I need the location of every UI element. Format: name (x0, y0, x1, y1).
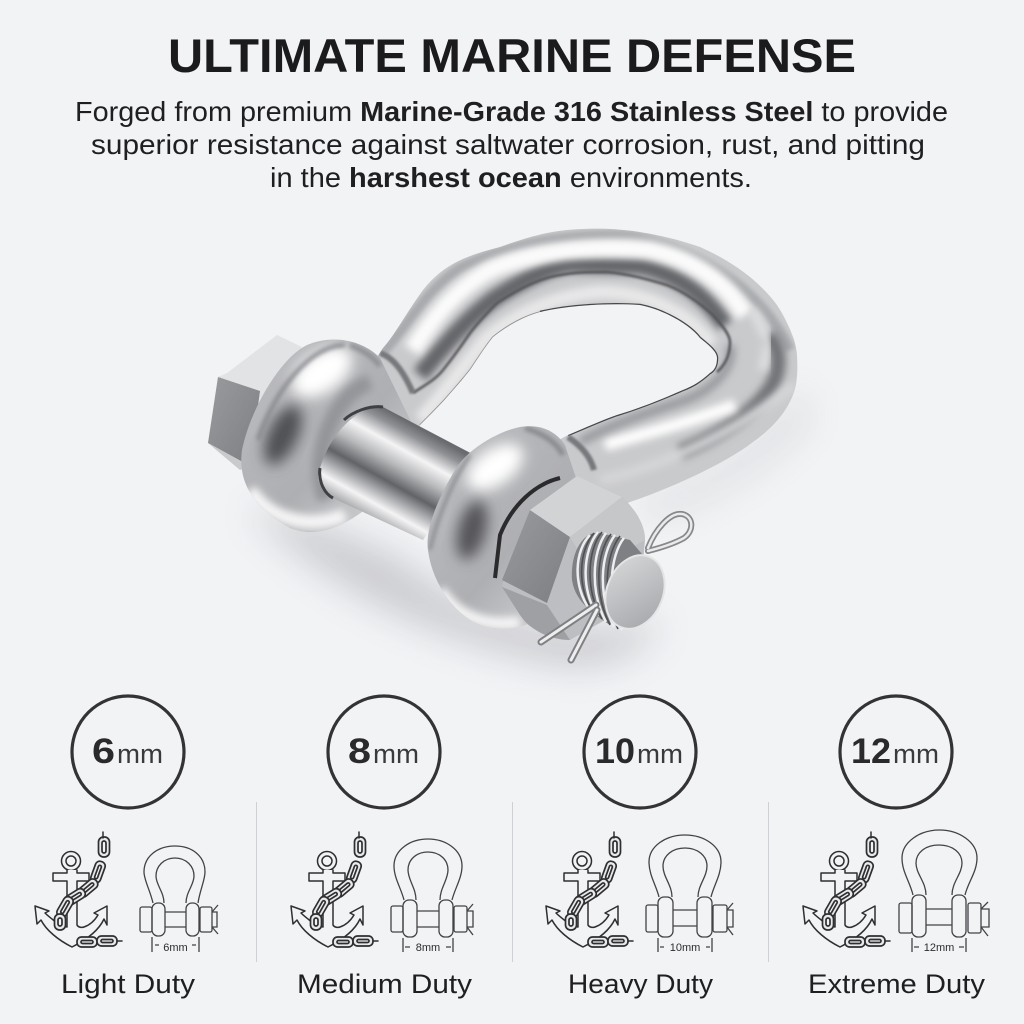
size badge 12mm (840, 696, 952, 808)
size badge 10mm: mm (637, 739, 683, 769)
dimension 6mm: 6mm (163, 942, 188, 954)
panel: 12mm extreme duty (803, 696, 989, 999)
label: medium duty: Medium Duty (297, 969, 473, 999)
label: light duty: Light Duty (61, 969, 196, 999)
icon: shackle diagram 6mm (140, 846, 218, 952)
size badge 8mm: mm (373, 739, 419, 769)
main product: stainless steel bow shackle (208, 210, 820, 666)
right lug (428, 426, 576, 628)
label: extreme duty: Extreme Duty (808, 969, 986, 999)
size badge 10mm: 10 (595, 732, 635, 771)
size badge 8mm (328, 696, 440, 808)
intro text block: superior resistance against saltwater corrosion, rust, and pitting (91, 129, 925, 160)
divider (256, 802, 768, 962)
panel: 6mm light duty (35, 696, 218, 999)
threaded pin end (572, 532, 675, 638)
dimension 12mm: 12mm (924, 942, 954, 954)
icon: shackle diagram 12mm (899, 830, 989, 952)
size badge 10mm (584, 696, 696, 808)
shackle shadow (250, 385, 810, 666)
icon: anchor and chain (291, 832, 378, 947)
near hex nut with washer gap (495, 476, 645, 640)
inner flange band (420, 292, 712, 420)
left lug (241, 340, 411, 532)
dimension 8mm: 8mm (416, 942, 440, 954)
intro text block: in the harshest ocean environments. (270, 162, 752, 193)
icon: anchor and chain (803, 832, 890, 947)
thread end cap (595, 546, 675, 638)
size badge 8mm: 8 (348, 732, 371, 771)
size badge 6mm (72, 696, 184, 808)
pin (318, 407, 480, 540)
hole edge (540, 304, 717, 435)
size badge 6mm: 6 (92, 732, 115, 771)
icon: shackle diagram 10mm (646, 835, 733, 952)
intro text block: Forged from premium Marine-Grade 316 Stainless Steel to provide (75, 96, 948, 127)
icon: anchor and chain (35, 832, 122, 947)
title: ULTIMATE MARINE DEFENSE (168, 29, 856, 82)
ridge line (413, 272, 730, 393)
shackle bow (378, 228, 798, 503)
size badge 12mm: 12 (851, 732, 891, 771)
icon: shackle diagram 8mm (391, 839, 473, 952)
cotter pin (541, 514, 691, 660)
tube shading (383, 235, 790, 352)
icon: anchor and chain (546, 832, 633, 947)
panel: 10mm heavy duty (546, 696, 733, 999)
size badge 12mm: mm (893, 739, 939, 769)
panel: 8mm medium duty (291, 696, 473, 999)
label: heavy duty: Heavy Duty (568, 969, 714, 999)
lug junction crease (380, 353, 413, 393)
intro text block (75, 96, 948, 193)
far hex nut (208, 335, 302, 470)
dimension 10mm: 10mm (670, 942, 700, 954)
size badge 6mm: mm (117, 739, 163, 769)
